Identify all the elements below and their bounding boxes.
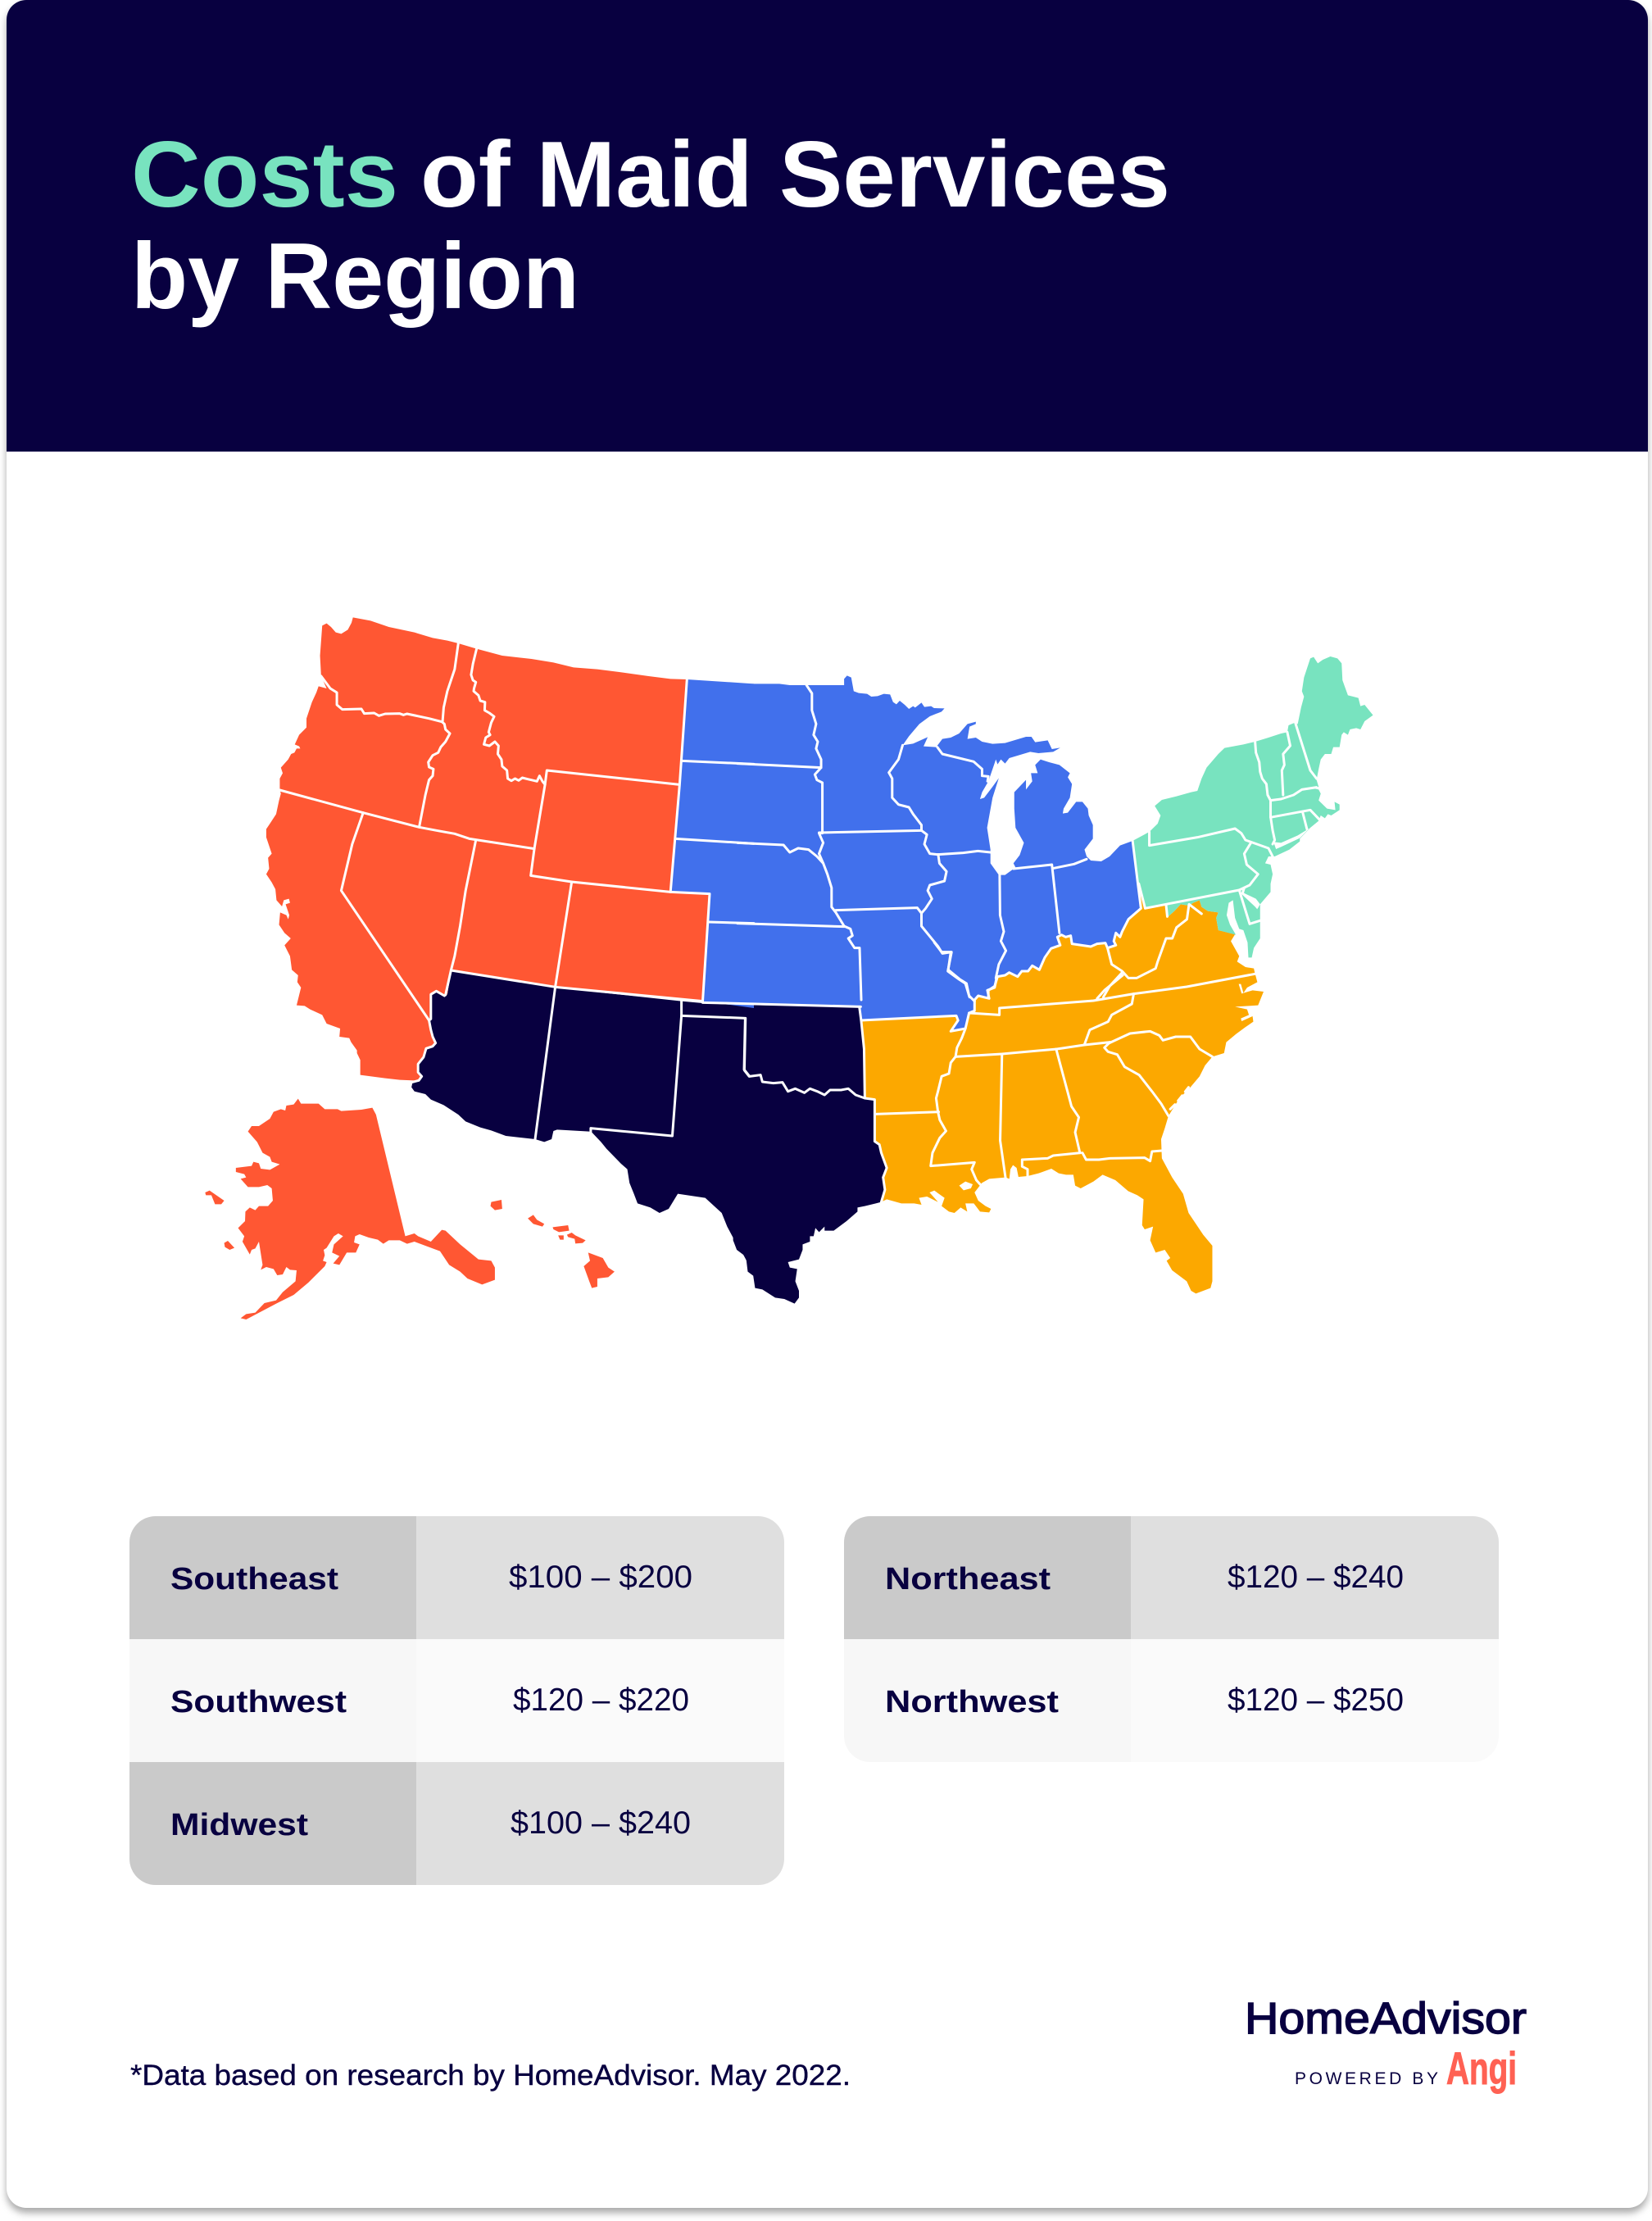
region: southwest xyxy=(411,971,887,1304)
region: northeast xyxy=(1132,656,1373,957)
title xyxy=(131,123,1170,329)
table: northeast northwest xyxy=(844,1516,1499,1762)
table: northeast northwest: Northeast xyxy=(885,1562,1051,1596)
region: southeast xyxy=(861,885,1264,1293)
footnote: *Data based on research by HomeAdvisor. May 2022. xyxy=(130,2060,851,2092)
region: northwest xyxy=(205,617,710,1319)
table: southeast southwest midwest: Southeast xyxy=(170,1562,338,1596)
region: midwest xyxy=(670,675,1141,1031)
state borders midwest and northeast xyxy=(738,685,1321,1000)
table: southeast southwest midwest: Southwest xyxy=(170,1685,347,1719)
title: of Maid Services xyxy=(420,123,1170,227)
table: southeast southwest midwest: $100 – $240 xyxy=(511,1805,691,1841)
logo: HomeAdvisor powered by Angi: HomeAdvisor xyxy=(1245,1994,1527,2043)
table: southeast southwest midwest: $120 – $220 xyxy=(513,1683,689,1718)
table: northeast northwest: $120 – $240 xyxy=(1228,1560,1404,1595)
hawaii xyxy=(491,1200,615,1288)
table: northeast northwest: $120 – $250 xyxy=(1228,1683,1404,1718)
table: southeast southwest midwest: $100 – $200 xyxy=(509,1560,692,1595)
table: northeast northwest: Northwest xyxy=(885,1685,1059,1719)
header band xyxy=(7,0,1648,452)
map of US regions xyxy=(205,617,1373,1319)
table: southeast southwest midwest: Midwest xyxy=(170,1808,308,1842)
title: by Region xyxy=(131,225,579,329)
logo: HomeAdvisor powered by Angi: Angi xyxy=(1446,2042,1517,2094)
logo: HomeAdvisor powered by Angi: POWERED BY xyxy=(1295,2069,1438,2088)
alaska islands xyxy=(205,1191,234,1250)
title: Costs xyxy=(131,123,398,227)
table: southeast southwest midwest xyxy=(129,1516,784,1885)
state borders west xyxy=(279,643,860,1139)
alaska xyxy=(236,1099,495,1319)
state borders south xyxy=(744,942,1255,1202)
logo: HomeAdvisor powered by Angi xyxy=(1245,1994,1527,2094)
